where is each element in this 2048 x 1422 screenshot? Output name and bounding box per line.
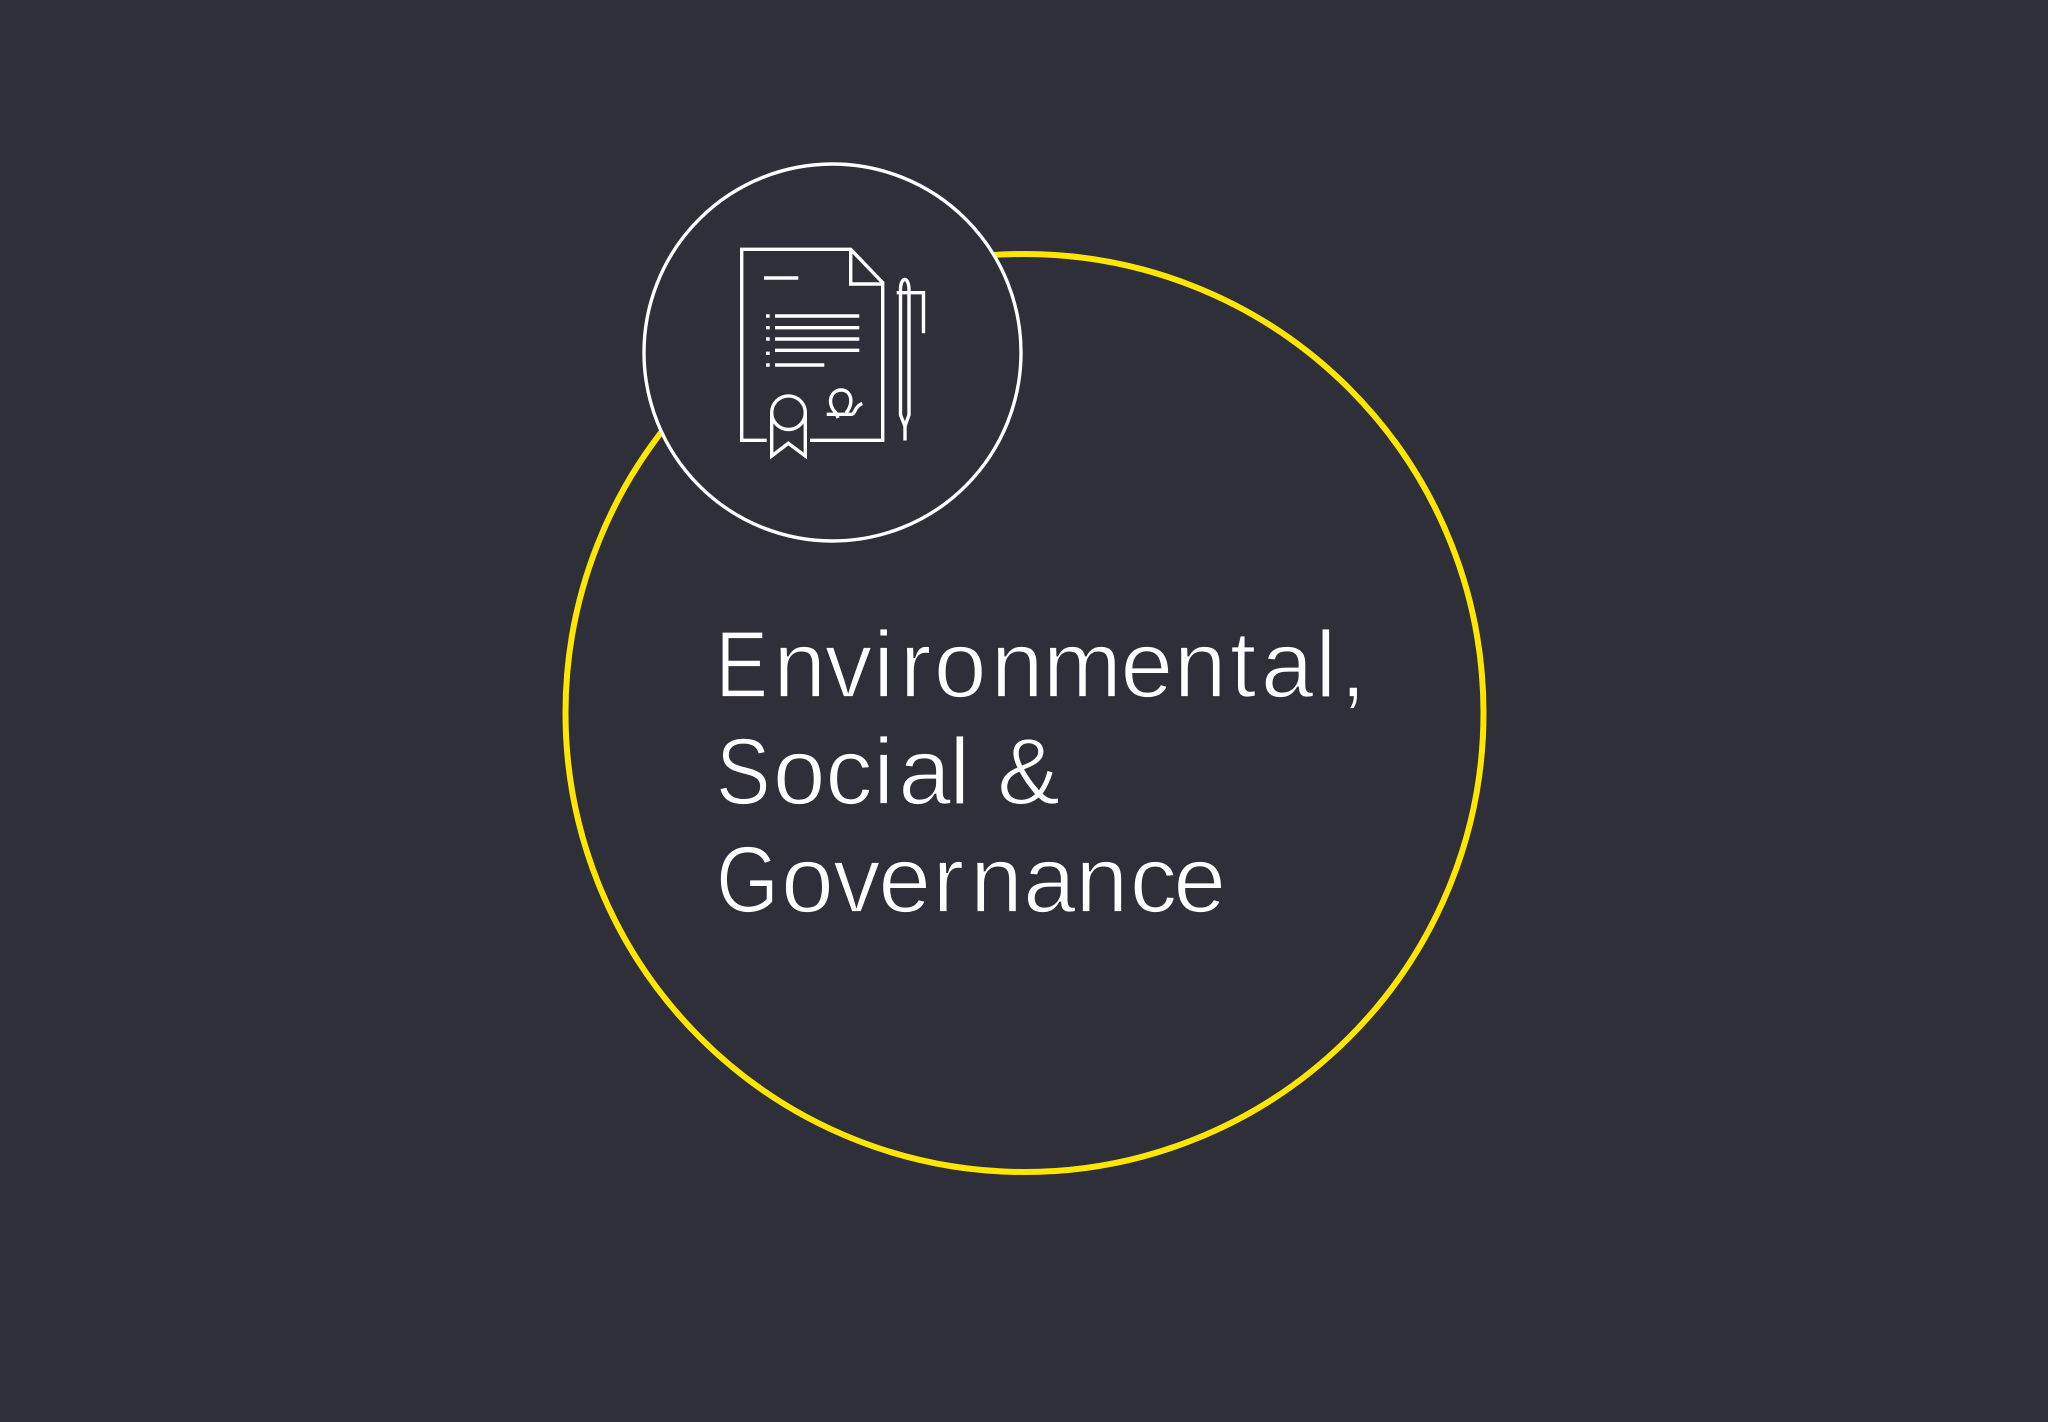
title line 2: ocial &	[773, 719, 1060, 825]
pen tip	[903, 426, 907, 440]
pen clip	[897, 293, 924, 333]
document outline	[742, 249, 883, 440]
title line 2: S	[716, 719, 771, 825]
title line 1: nvironmental,	[773, 612, 1366, 718]
folded corner	[851, 249, 883, 284]
title line 3: G	[716, 827, 779, 933]
document text lines	[775, 316, 859, 365]
title text	[715, 612, 1366, 933]
white icon circle	[644, 164, 1021, 541]
document heading dash	[764, 276, 798, 280]
yellow ring	[566, 254, 1484, 1172]
pen body	[900, 280, 909, 426]
title line 1: E	[715, 612, 768, 718]
bullet points	[766, 316, 770, 365]
icon: document with seal and pen	[742, 249, 924, 456]
seal ribbon	[772, 413, 805, 456]
signature	[827, 390, 862, 418]
seal medallion	[772, 396, 805, 430]
title line 3: overnance	[781, 827, 1226, 933]
